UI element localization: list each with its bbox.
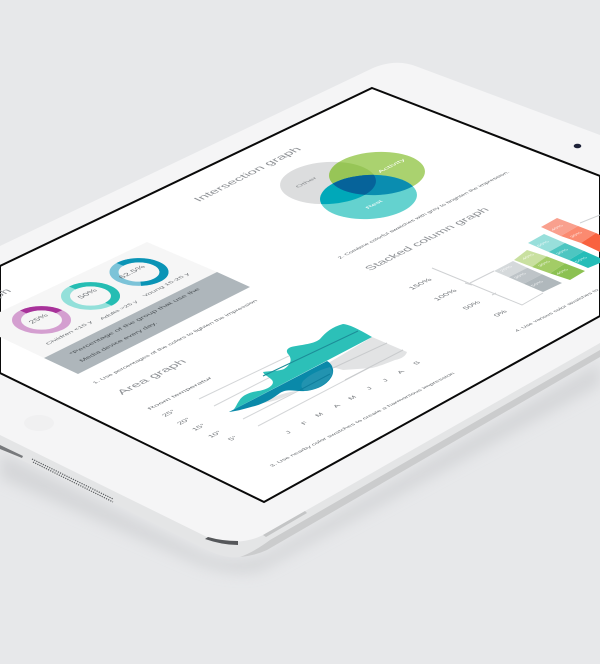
- grid lines over areas: [263, 331, 358, 390]
- venn labels: [295, 158, 408, 210]
- column: green: 30%: [537, 260, 552, 268]
- bezel: [0, 63, 600, 542]
- axes: [432, 215, 600, 305]
- column: green: 40%: [555, 268, 570, 276]
- column: teal: [528, 234, 600, 268]
- venn labels: Other: [295, 177, 319, 189]
- venn labels: Activity: [377, 158, 408, 174]
- circle: rest: [319, 172, 418, 222]
- x axis labels: J: [381, 378, 390, 383]
- column: orange: 40%: [550, 224, 565, 232]
- note text: Media device every day.: [78, 321, 159, 363]
- overlap: activity and other: [329, 162, 374, 184]
- circle: activity: [328, 150, 426, 197]
- column: orange: 30%: [569, 231, 584, 239]
- column: green: 40%: [521, 253, 536, 261]
- column: teal: 30%: [555, 248, 570, 256]
- y axis labels: 15°: [190, 423, 208, 432]
- stacked column chart: [407, 215, 600, 318]
- x axis labels: S: [412, 361, 423, 366]
- y axis labels: [160, 409, 240, 442]
- x axis labels: M: [314, 412, 326, 418]
- tablet device: [0, 63, 600, 557]
- screen: [0, 88, 600, 502]
- x axis labels: M: [347, 395, 359, 401]
- y axis labels: 25°: [160, 409, 178, 418]
- caption 3: 3. Use nearby color swatches to create a harmonious impression: [269, 372, 457, 468]
- heading: intersection graph: Intersection graph: [191, 145, 304, 203]
- donut labels: Children <15 y: [45, 321, 95, 346]
- metal edge: [0, 335, 600, 557]
- note text: *Percentage of the group that use the: [68, 287, 202, 356]
- grid line on grey lower: [345, 350, 403, 380]
- heading: area graph: Area graph: [114, 358, 189, 396]
- teal area: [229, 324, 372, 412]
- column: grey: 50%: [530, 280, 545, 288]
- overlap: rest and other: [320, 174, 374, 204]
- panel: donut charts: [0, 242, 250, 374]
- metal lower shade: [240, 350, 600, 557]
- x axis labels: A: [332, 404, 343, 409]
- column: teal: 60%: [536, 240, 551, 248]
- axis labels: 0%: [492, 309, 509, 318]
- note text: [68, 287, 202, 363]
- x axis labels: J: [284, 430, 293, 435]
- column: green: [514, 250, 585, 280]
- column: grey: 30%: [513, 272, 528, 280]
- axis title: Room temperatur: [147, 377, 214, 411]
- y axis labels: 10°: [206, 430, 224, 439]
- grid lines behind: [199, 342, 403, 426]
- camera: [574, 144, 581, 148]
- caption 1: 1. Use percentages of the colors to lighten the impression: [92, 299, 259, 385]
- blue area: [229, 361, 333, 412]
- x axis labels: [284, 361, 423, 435]
- circle: other: [279, 160, 377, 206]
- donut 50%: [55, 279, 126, 313]
- note band: [44, 272, 250, 374]
- grey area: [262, 337, 407, 403]
- axis labels: [407, 277, 509, 318]
- y axis labels: 20°: [175, 417, 193, 426]
- donut labels: Adults >25 y: [99, 300, 140, 321]
- donut labels: Young 15-25 y: [142, 273, 192, 298]
- panel background: [0, 242, 217, 358]
- x axis labels: F: [300, 421, 310, 426]
- area chart: [147, 324, 423, 442]
- axis labels: 100%: [432, 288, 459, 302]
- blue overlap: [301, 367, 333, 391]
- donut values: 50%: [76, 288, 100, 300]
- donut values: 62.5%: [117, 264, 148, 280]
- x axis labels: J: [365, 386, 374, 391]
- chamfer highlight: [205, 537, 238, 545]
- caption 4: 4. Use various color swatches to: [514, 289, 600, 333]
- overlap: activity and rest: [333, 174, 413, 196]
- donut 62.5%: [104, 255, 174, 289]
- home button: [24, 415, 54, 431]
- overlap: all three: [332, 174, 376, 195]
- edge highlight: [263, 511, 307, 537]
- x axis labels: A: [396, 370, 407, 375]
- donut values: [27, 264, 148, 325]
- device shadow: [0, 362, 600, 573]
- grid line on grey: [333, 343, 387, 368]
- caption 2: 2. Combine colorful swatches with grey to brighten the impression.: [337, 171, 512, 260]
- axis labels: 150%: [407, 277, 434, 291]
- side switch: [0, 445, 23, 458]
- column: teal: 50%: [574, 256, 589, 264]
- donut values: 25%: [27, 313, 51, 325]
- speaker grille: [32, 459, 113, 502]
- donut labels: [45, 273, 192, 346]
- heading: stacked column graph: Stacked column graph: [362, 206, 492, 272]
- column: grey: 20%: [499, 265, 514, 273]
- column: grey: [494, 261, 562, 292]
- donut 25%: [6, 303, 77, 337]
- venn diagram: [279, 150, 426, 222]
- axis labels: 50%: [461, 300, 483, 311]
- venn labels: Rest: [365, 200, 385, 210]
- column: orange: [541, 218, 600, 252]
- y axis labels: 5°: [226, 435, 240, 442]
